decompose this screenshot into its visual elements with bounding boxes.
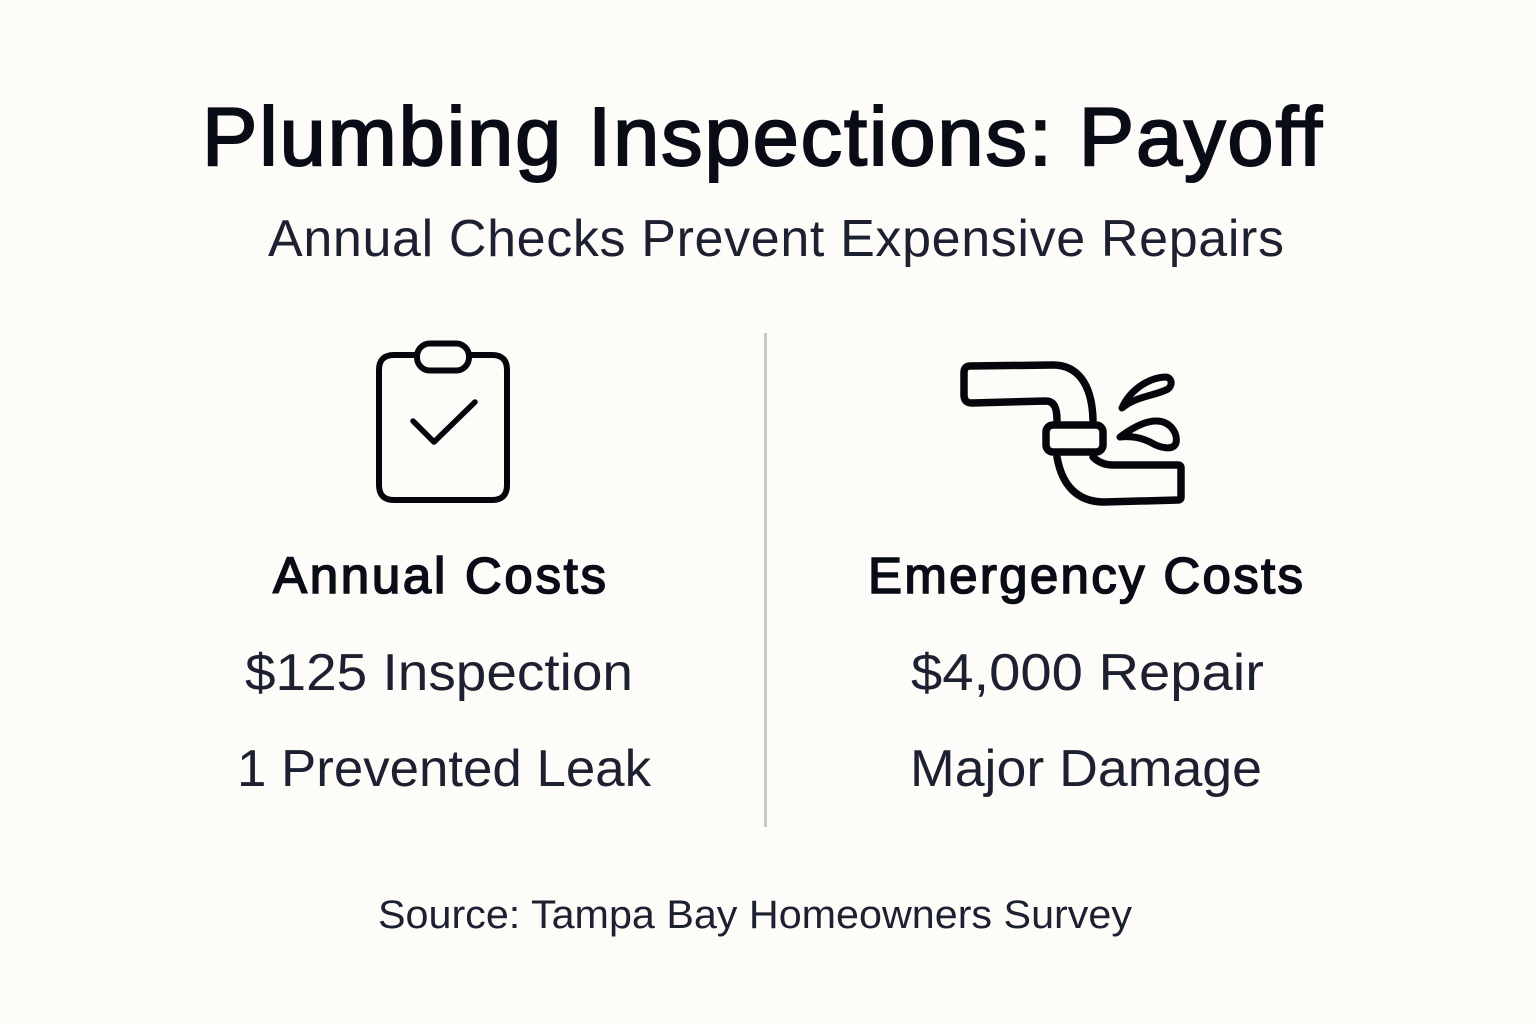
heading: annual costs: Annual Costs — [273, 547, 606, 604]
panel: annual costs — [237, 344, 652, 798]
icon: leaking pipe — [964, 365, 1181, 502]
text: inspection cost: $125 Inspection — [245, 644, 633, 702]
title: Plumbing Inspections: Payoff — [202, 90, 1323, 183]
heading: emergency costs: Emergency Costs — [868, 547, 1303, 604]
text: major damage: Major Damage — [910, 740, 1262, 798]
panel: emergency costs — [868, 365, 1303, 798]
source note: Source: Tampa Bay Homeowners Survey — [378, 893, 1132, 937]
text: repair cost: $4,000 Repair — [911, 644, 1264, 702]
text: prevented leak: 1 Prevented Leak — [237, 740, 652, 798]
divider — [764, 333, 767, 827]
icon: clipboard with check mark — [379, 344, 507, 500]
subtitle: Annual Checks Prevent Expensive Repairs — [268, 210, 1284, 268]
